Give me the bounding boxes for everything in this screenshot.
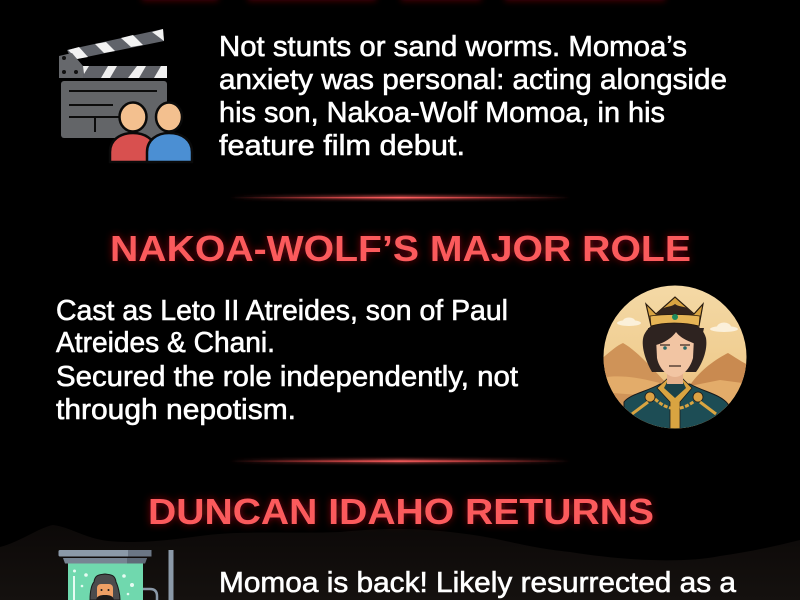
hair fringe [648, 328, 704, 346]
face [656, 332, 694, 377]
top heading glow (cropped heading) [142, 0, 665, 1]
person: right, blue [147, 102, 192, 162]
paragraph: Duncan Idaho return: Momoa is back! Likely resurrected as a [219, 567, 736, 599]
paragraph: Leto II casting [56, 295, 518, 426]
divider [230, 196, 570, 199]
paragraph: Momoa's anxiety: anxiety was personal: acting alongside [219, 64, 727, 96]
uniform [624, 384, 728, 430]
hair back [643, 320, 706, 372]
paragraph: Momoa's anxiety: Not stunts or sand worms. Momoa’s [219, 31, 687, 63]
paragraph: Momoa's anxiety: feature film debut. [219, 130, 465, 162]
paragraph: Leto II casting: Secured the role independently, not [56, 361, 518, 393]
eyes and mouth [660, 345, 690, 366]
clapper body [61, 81, 167, 138]
clapper lower stripe [83, 66, 167, 78]
neck [667, 374, 683, 384]
side tube [143, 589, 157, 600]
tank lid [58, 550, 152, 564]
heading: Duncan Idaho returns: DUNCAN IDAHO RETURNS [148, 491, 654, 532]
icon: Duncan in a tank [58, 550, 174, 600]
background: dune silhouette [0, 525, 800, 600]
paragraph: Momoa's anxiety: his son, Nakoa-Wolf Momoa, in his [219, 97, 665, 129]
tank glass [68, 564, 143, 600]
crown [646, 297, 703, 326]
icon: crowned Leto II portrait [600, 285, 750, 430]
desert sky [603, 285, 747, 429]
clouds [617, 318, 738, 332]
icon: film clapperboard with two people [59, 29, 192, 162]
paragraph: Leto II casting: Atreides & Chani. [56, 327, 275, 359]
vertical pipe [168, 550, 174, 600]
person: left, red [110, 102, 155, 162]
heading: Nakoa-Wolf's major role: NAKOA-WOLF’S MAJOR ROLE [110, 228, 691, 269]
clapper top arm [67, 29, 164, 60]
sand dunes [604, 343, 664, 384]
divider [230, 460, 570, 462]
clapper hinge [59, 53, 84, 78]
paragraph: Momoa's anxiety [219, 31, 727, 162]
paragraph: Leto II casting: through nepotism. [56, 394, 296, 426]
paragraph: Leto II casting: Cast as Leto II Atreides, son of Paul [56, 295, 508, 327]
person with long hair and beard [90, 574, 120, 600]
